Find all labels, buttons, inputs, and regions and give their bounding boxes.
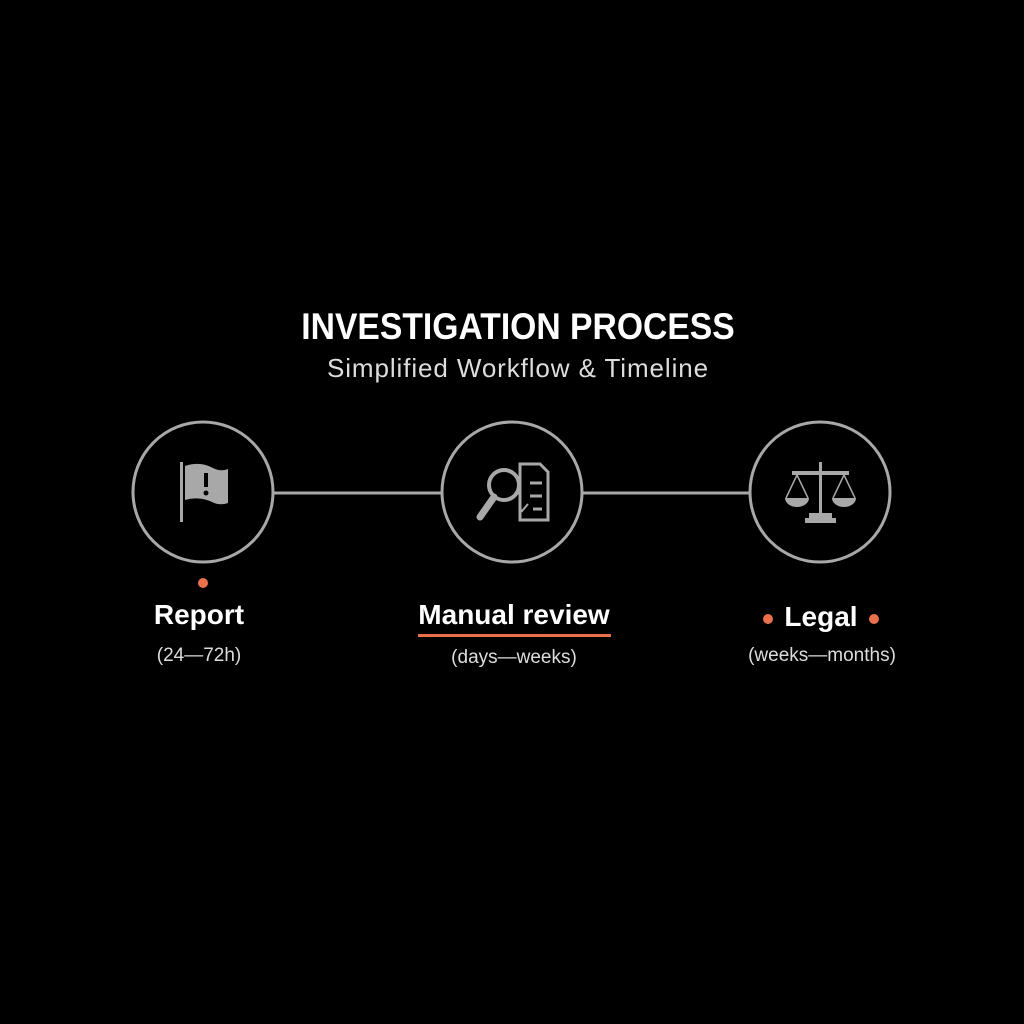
subtitle: Simplified Workflow & Timeline [327,353,709,383]
title: INVESTIGATION PROCESS [301,306,735,347]
orange accents [198,578,879,637]
icon: flag [180,462,228,522]
node: manual review [442,422,582,562]
label: report: Report [154,599,244,630]
node: report [133,422,273,562]
time: report: (24—72h) [157,645,241,666]
icon: scales [785,462,856,523]
time: manual review: (days—weeks) [451,647,577,668]
connector line [273,492,751,494]
icon: magnifier and document [480,464,548,520]
label: manual review: Manual review [418,599,610,630]
node: legal [750,422,890,562]
label: legal: Legal [784,601,858,632]
time: legal: (weeks—months) [748,645,896,666]
